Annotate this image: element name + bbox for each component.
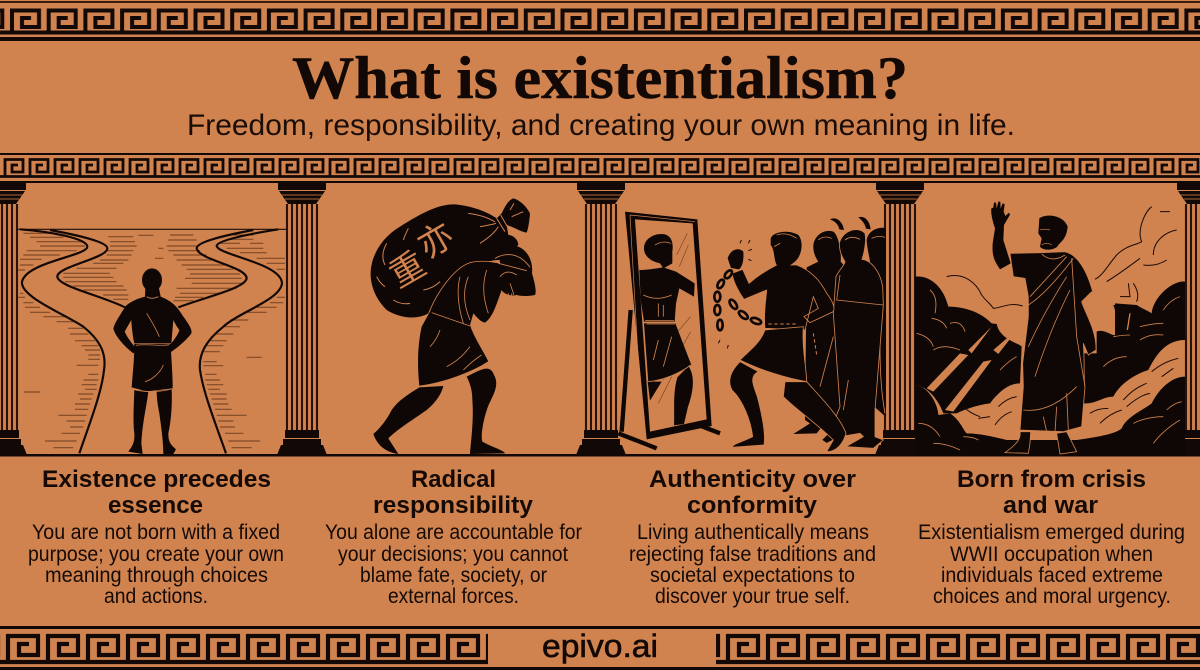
reflection figure: [639, 234, 695, 425]
column 4: [875, 183, 925, 455]
body 2: external forces.: [388, 585, 519, 608]
title: What is existentialism?: [292, 45, 908, 111]
top meander border: [0, 1, 1200, 41]
panel 1: man at forking paths: [17, 229, 287, 454]
heading 4: and war: [1003, 492, 1098, 519]
sack: 亦: [407, 207, 462, 268]
panel 2: man carrying sack: [371, 198, 536, 454]
body 2: You alone are accountable for: [325, 521, 582, 544]
heading 3: conformity: [687, 492, 818, 519]
panel 4: figure among war smoke and rockets: [915, 202, 1185, 455]
body 1: You are not born with a fixed: [32, 521, 280, 544]
heading 1: [42, 466, 271, 519]
column 1 text: [28, 466, 284, 608]
bottom meander border: [0, 626, 1200, 670]
body 4: Existentialism emerged during: [918, 521, 1185, 544]
mirror: [618, 212, 720, 448]
heading 4: [957, 466, 1146, 519]
man silhouette: [113, 268, 192, 454]
column 3: [576, 183, 626, 455]
heading 1: essence: [108, 492, 203, 519]
body 1: purpose; you create your own: [28, 543, 284, 566]
heading 4: Born from crisis: [957, 466, 1146, 493]
chains: [714, 269, 817, 357]
heading 3: Authenticity over: [649, 466, 856, 493]
column 4 text: [918, 466, 1185, 608]
sack: 重: [378, 237, 433, 297]
standing figure: [991, 202, 1096, 454]
column 1: [0, 183, 27, 455]
body 3: discover your true self.: [655, 585, 850, 608]
body 2: blame fate, society, or: [360, 564, 547, 587]
column 5: [1176, 183, 1200, 455]
footer brand: epivo.ai: [542, 628, 658, 664]
body 4: [918, 521, 1185, 608]
body 3: rejecting false traditions and: [629, 543, 876, 566]
body 1: [28, 521, 284, 608]
body 3: [629, 521, 876, 608]
heading 1: Existence precedes: [42, 466, 271, 493]
heading 2: Radical: [411, 466, 496, 493]
body 4: WWII occupation when: [950, 543, 1153, 566]
column 3 text: [629, 466, 876, 608]
subtitle: Freedom, responsibility, and creating your own meaning in life.: [187, 109, 1015, 142]
body 3: societal expectations to: [650, 564, 855, 587]
body 4: individuals faced extreme: [941, 564, 1163, 587]
heading 2: responsibility: [373, 492, 534, 519]
crowd: [793, 217, 890, 448]
body 3: Living authentically means: [637, 521, 869, 544]
column 2 text: [325, 466, 582, 608]
heading 2: [373, 466, 534, 519]
body 2: your decisions; you cannot: [338, 543, 568, 566]
body 2: [325, 521, 582, 608]
body 4: choices and moral urgency.: [933, 585, 1171, 608]
body 1: and actions.: [104, 585, 208, 608]
column 2: [277, 183, 327, 455]
sack: [371, 198, 530, 317]
middle meander border: [0, 153, 1200, 456]
panel 3: mirror and man breaking chains: [618, 212, 890, 452]
heading 3: [649, 466, 856, 519]
main man: [730, 265, 846, 452]
smoke and rockets: [915, 207, 1185, 455]
figure: [373, 246, 536, 454]
body 1: meaning through choices: [45, 564, 268, 587]
